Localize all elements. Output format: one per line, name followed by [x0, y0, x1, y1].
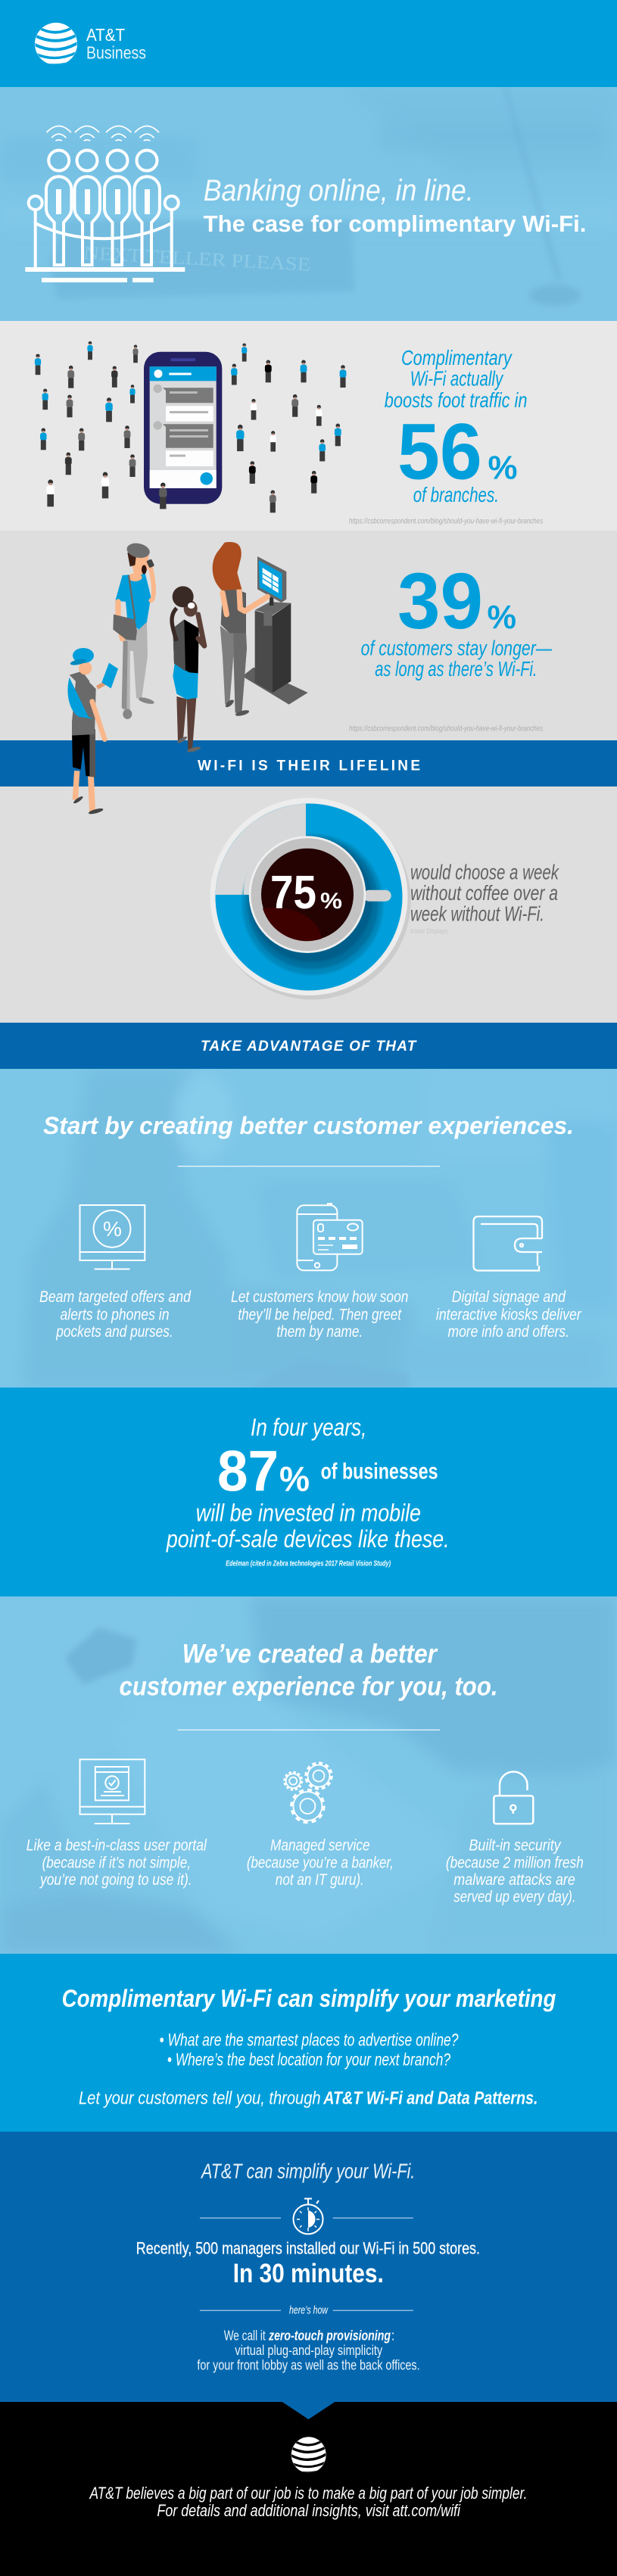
banner: Wi-Fi is their lifeline: [0, 740, 617, 787]
desk sign text: NEXT TELLER PLEASE: [83, 243, 311, 276]
foot traffic text: Wi-Fi actually: [410, 366, 504, 390]
panel: simplify your marketing: • Where’s the best location for your next branch?: [167, 2050, 450, 2070]
coffee text: would choose a week: [410, 861, 559, 884]
icon: padlock: [494, 1771, 533, 1824]
captions: (because if it’s not simple,: [42, 1854, 191, 1871]
crowd of people: [35, 341, 346, 512]
captions: you’re not going to use it).: [39, 1871, 192, 1889]
icon: smartphone chat: [144, 352, 222, 509]
cup shadow: [242, 834, 383, 975]
woman on phone: [172, 586, 204, 753]
panel: 87% stat: of businesses: [321, 1459, 438, 1484]
donut chart: coffee cup 75%: [210, 798, 410, 999]
captions: Beam targeted offers and: [39, 1288, 192, 1306]
panel: stay longer stat: [0, 531, 617, 740]
background photo: phone in hands: [0, 1596, 617, 1954]
panel: coffee stat: [0, 787, 617, 1023]
stay longer text: of customers stay longer—: [361, 637, 553, 660]
panel: simplify your marketing: Complimentary Wi-Fi can simplify your marketing: [62, 1985, 556, 2012]
heading: [120, 1640, 498, 1701]
panel: simplify your Wi-Fi: [0, 2132, 617, 2402]
icon: cup handle: [363, 890, 391, 902]
panel: hero: [0, 87, 617, 321]
stay longer text: [349, 557, 553, 733]
captions: Let customers know how soon: [231, 1288, 409, 1306]
icon: monitor with portal: [80, 1759, 145, 1824]
hero title: The case for complimentary Wi-Fi.: [204, 210, 586, 237]
zero-touch text: zero-touch provisioning: [268, 2328, 391, 2344]
coffee text: [410, 861, 559, 936]
hero background photo: [53, 92, 578, 304]
zero-touch text: for your front lobby as well as the back offices.: [197, 2357, 420, 2373]
stay longer text: %: [488, 599, 516, 636]
icon: queue with Wi-Fi: [25, 126, 185, 282]
closing text: For details and additional insights, visit att.com/wifi: [157, 2501, 461, 2520]
stay longer text: 39: [397, 557, 483, 646]
background photo: woman with phone: [183, 1079, 409, 1388]
panel: 87% stat: [0, 1388, 617, 1596]
zero-touch text: virtual plug-and-play simplicity: [235, 2342, 383, 2358]
icon: AT&T globe logo: [290, 2437, 327, 2473]
donut chart: coffee cup 75%: 75: [270, 867, 316, 919]
man with hat on phone: [113, 541, 154, 719]
captions: [39, 1288, 582, 1341]
icon: monitor with percent: [80, 1205, 145, 1269]
icon: wallet: [474, 1216, 542, 1270]
panel: 87% stat: point-of-sale devices like these.: [166, 1525, 450, 1553]
captions: more info and offers.: [448, 1323, 569, 1341]
banner: take advantage of that: TAKE ADVANTAGE OF THAT: [201, 1039, 417, 1054]
panel: 87% stat: Edelman (cited in Zebra technologies 2017 Retail Vision Study): [226, 1559, 391, 1568]
zero-touch text: :: [391, 2328, 395, 2344]
panel: simplify your marketing: AT&T Wi-Fi and Data Patterns.: [323, 2088, 538, 2108]
panel: simplify your Wi-Fi: Recently, 500 managers installed our Wi-Fi in 500 stores.: [136, 2238, 480, 2257]
logo wordmark: Business: [86, 42, 146, 62]
divider line: [177, 1166, 440, 1167]
foot traffic text: boosts foot traffic in: [385, 388, 527, 412]
foot traffic text: 56: [397, 407, 482, 497]
captions: Built-in security: [469, 1836, 562, 1854]
captions: Like a best-in-class user portal: [26, 1836, 207, 1854]
captions: not an IT guru).: [276, 1871, 364, 1889]
icon: monitor with percent: %: [103, 1217, 122, 1241]
foot traffic text: Complimentary: [401, 346, 513, 369]
arrow: [282, 2402, 335, 2419]
coffee text: week without Wi-Fi.: [410, 902, 544, 926]
captions: (because 2 million fresh: [446, 1854, 584, 1871]
kiosk: [242, 556, 308, 705]
panel: footer: [89, 2402, 525, 2519]
boy with tablet: [67, 648, 118, 815]
captions: alerts to phones in: [61, 1306, 170, 1323]
captions: served up every day).: [453, 1889, 575, 1906]
captions: them by name.: [276, 1323, 363, 1341]
stay longer text: as long as there’s Wi-Fi.: [375, 657, 538, 681]
header band: [0, 0, 617, 87]
donut chart: coffee cup 75%: %: [320, 889, 342, 914]
icon: wifi signals: [47, 126, 159, 141]
panel: better customer experiences: [0, 1069, 617, 1389]
panel: 87% stat: %: [279, 1459, 310, 1498]
captions: (because you’re a banker,: [247, 1854, 394, 1871]
panel: 87% stat: In four years,: [251, 1414, 366, 1441]
panel: 87% stat: 87: [217, 1439, 279, 1503]
illustration: people at kiosk: [67, 541, 308, 815]
foot traffic text: %: [488, 450, 518, 486]
icon: gears: [285, 1763, 332, 1823]
coffee text: without coffee over a: [410, 881, 558, 905]
icon: stopwatch: [294, 2198, 323, 2234]
panel: foot traffic stat: [0, 321, 617, 531]
icon: cup: [249, 836, 366, 953]
icon: AT&T globe logo: [33, 23, 79, 65]
coffee text: Iconic Displays: [410, 927, 448, 936]
captions: they’ll be helped. Then greet: [238, 1306, 402, 1323]
banner: Wi-Fi is their lifeline: WI-FI IS THEIR LIFELINE: [198, 758, 420, 774]
panel: simplify your marketing: [0, 1954, 617, 2132]
panel: simplify your marketing: • What are the smartest places to advertise online?: [159, 2030, 459, 2050]
dividers: [200, 2217, 413, 2219]
foot traffic text: of branches.: [413, 483, 499, 506]
zero-touch text: We call it: [224, 2328, 266, 2344]
heading: We’ve created a better: [182, 1640, 438, 1669]
panel: simplify your marketing: Let your customers tell you, through: [79, 2088, 321, 2108]
captions: interactive kiosks deliver: [436, 1306, 582, 1323]
panel: better experience for you: [0, 1596, 617, 1954]
panel: simplify your Wi-Fi: AT&T can simplify your Wi-Fi.: [200, 2159, 415, 2182]
foot traffic text: https://csbcorrespondent.com/blog/should-you-have-wi-fi-your-branches: [349, 517, 543, 525]
panel: simplify your Wi-Fi: In 30 minutes.: [233, 2259, 384, 2288]
foot traffic text: [349, 346, 543, 525]
captions: pockets and purses.: [55, 1323, 173, 1341]
hero title: [204, 174, 586, 237]
logo wordmark: [86, 25, 146, 62]
banner: take advantage of that: [0, 1023, 617, 1069]
panel: 87% stat: will be invested in mobile: [196, 1499, 421, 1526]
here's how divider: here’s how: [289, 2304, 329, 2317]
stay longer text: https://csbcorrespondent.com/blog/should-you-have-wi-fi-your-branches: [349, 724, 543, 733]
heading: customer experience for you, too.: [120, 1671, 498, 1701]
captions: Managed service: [270, 1836, 370, 1854]
captions: Digital signage and: [452, 1288, 566, 1306]
closing text: [89, 2484, 528, 2520]
icon: phone and credit card: [297, 1204, 363, 1270]
zero-touch text: [197, 2328, 420, 2373]
logo wordmark: AT&T: [86, 25, 125, 45]
captions: [26, 1836, 584, 1906]
redhead woman: [213, 542, 267, 717]
figures: [29, 150, 179, 267]
captions: malware attacks are: [453, 1871, 575, 1889]
hero title: Banking online, in line.: [204, 174, 474, 207]
heading: Start by creating better customer experiences.: [43, 1112, 574, 1139]
